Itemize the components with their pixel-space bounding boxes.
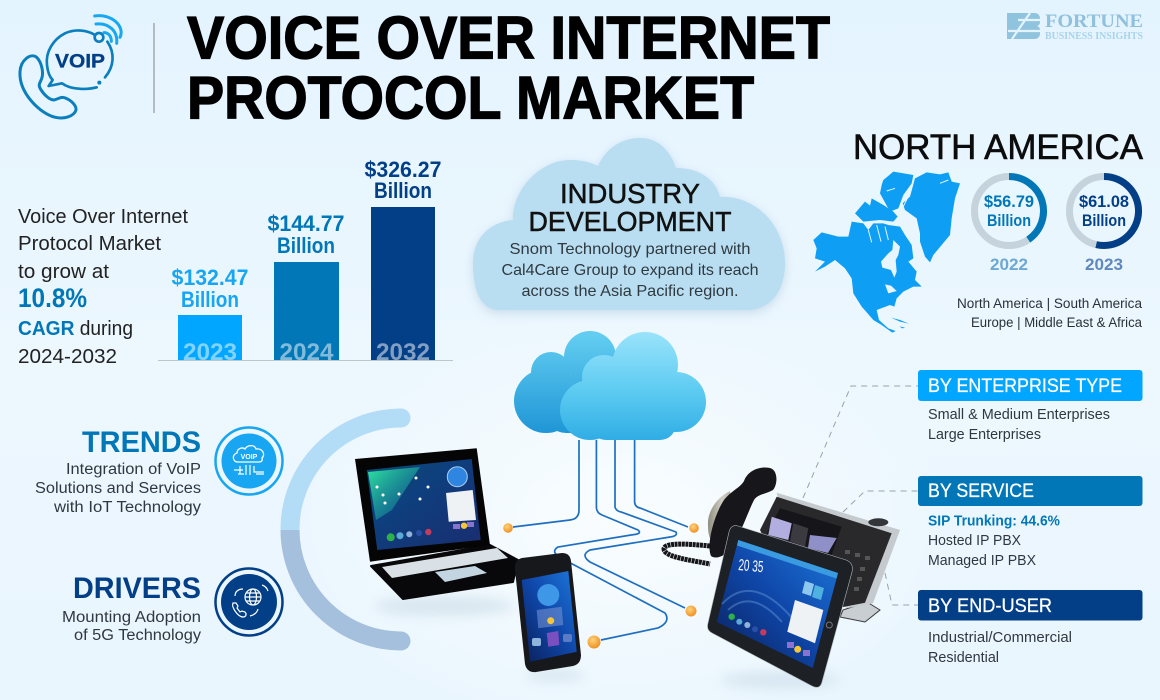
panel: trends: Integration of VoIP xyxy=(66,461,201,478)
panel: industry development cloud: across the Asia Pacific region. xyxy=(522,283,738,300)
chart: 2022 donut: $56.79 xyxy=(984,192,1034,211)
panel: drivers: DRIVERS xyxy=(73,572,201,605)
title xyxy=(187,6,830,132)
network wires xyxy=(513,437,688,640)
panel: drivers: of 5G Technology xyxy=(74,627,201,644)
panel: market growth text: 2024-2032 xyxy=(18,346,117,368)
panel: drivers xyxy=(62,572,201,644)
panel: market growth text: CAGR during xyxy=(18,318,133,340)
brand logo: Fortune Business Insights xyxy=(1007,11,1143,42)
brand logo: Fortune Business Insights: FORTUNE xyxy=(1045,11,1143,32)
logo: VOIP phone icon: VOIP xyxy=(55,52,105,73)
chart: 2022 donut: Billion xyxy=(987,211,1031,230)
bar chart xyxy=(158,157,453,366)
bar chart: 2023 xyxy=(183,339,237,366)
panel: by service xyxy=(918,476,1142,569)
bar chart: $132.47 xyxy=(172,265,248,290)
heading: North America: NORTH AMERICA xyxy=(853,127,1143,167)
bar chart: Billion xyxy=(374,178,432,203)
panel: trends: with IoT Technology xyxy=(53,499,201,516)
dashed connectors xyxy=(803,386,918,605)
text: regions xyxy=(957,296,1142,330)
chart: 2023 donut xyxy=(1070,176,1139,274)
panel: by enterprise type: Large Enterprises xyxy=(928,427,1041,443)
panel: by end-user xyxy=(918,590,1142,666)
chart: 2022 donut: 2022 xyxy=(990,255,1028,274)
panel: trends: Solutions and Services xyxy=(35,480,201,497)
chart: 2023 donut: Billion xyxy=(1082,211,1126,230)
phone illustration xyxy=(515,553,581,672)
desk phone illustration xyxy=(664,468,900,622)
text: regions: Europe | Middle East & Africa xyxy=(971,315,1142,330)
panel: industry development cloud: DEVELOPMENT xyxy=(528,206,732,237)
brand logo: Fortune Business Insights: BUSINESS INSIGHTS xyxy=(1045,31,1143,42)
bar chart: $144.77 xyxy=(268,211,344,236)
panel: by end-user: BY END-USER xyxy=(928,595,1052,617)
panel: trends: TRENDS xyxy=(82,426,201,459)
tablet illustration xyxy=(708,526,852,687)
bar chart: Billion xyxy=(277,233,335,258)
chart: 2022 donut xyxy=(974,176,1044,274)
bar chart: 2024 xyxy=(280,339,334,366)
icon: VoIP cloud: VOIP xyxy=(241,454,258,461)
panel: market growth text: to grow at xyxy=(18,261,109,283)
floor reflections xyxy=(375,596,840,688)
panel: market growth text: 10.8% xyxy=(18,283,87,313)
panel: industry development cloud xyxy=(473,138,785,310)
panel: by end-user: Residential xyxy=(928,650,999,666)
panel: by service: Managed IP PBX xyxy=(928,553,1036,569)
bar chart: Billion xyxy=(181,287,239,312)
icon: VoIP cloud xyxy=(216,428,282,494)
tablet illustration: 20 35 xyxy=(738,557,764,576)
panel: by service: SIP Trunking: 44.6% xyxy=(928,514,1060,530)
panel: market growth text xyxy=(18,206,188,368)
chart: 2023 donut: 2023 xyxy=(1085,255,1123,274)
text: regions: North America | South America xyxy=(957,296,1142,311)
panel: market growth text: Protocol Market xyxy=(18,233,161,255)
panel: industry development cloud: Cal4Care Group to expand its reach xyxy=(502,262,758,279)
panel: by service: Hosted IP PBX xyxy=(928,533,1021,549)
panel: by enterprise type xyxy=(918,370,1142,443)
chart: 2023 donut: $61.08 xyxy=(1079,192,1129,211)
laptop illustration xyxy=(355,448,518,599)
panel: market growth text: Voice Over Internet xyxy=(18,206,188,228)
panel: industry development cloud: INDUSTRY xyxy=(560,178,700,209)
panel: drivers: Mounting Adoption xyxy=(62,609,201,626)
title: PROTOCOL MARKET xyxy=(187,66,754,132)
panel: by enterprise type: Small & Medium Enterprises xyxy=(928,407,1110,423)
map: North America xyxy=(813,172,960,333)
cloud illustration xyxy=(514,331,706,440)
connector balls xyxy=(503,523,699,648)
panel: by end-user: Industrial/Commercial xyxy=(928,630,1072,646)
header divider xyxy=(153,23,155,113)
logo: VOIP phone icon xyxy=(20,16,121,118)
bar chart: 2032 xyxy=(376,339,430,366)
arc: trends and drivers xyxy=(290,408,410,650)
panel: by service: BY SERVICE xyxy=(928,480,1034,502)
bar chart: $326.27 xyxy=(364,157,442,182)
icon: global phone network xyxy=(216,568,282,636)
panel: trends xyxy=(35,426,201,516)
panel: by enterprise type: BY ENTERPRISE TYPE xyxy=(928,375,1122,397)
panel: industry development cloud: Snom Technology partnered with xyxy=(510,241,750,258)
title: VOICE OVER INTERNET xyxy=(187,6,830,72)
